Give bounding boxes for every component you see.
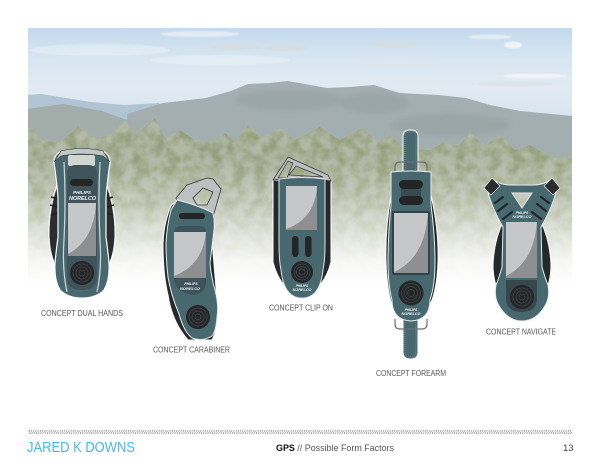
- logo: PHILIPS: [73, 190, 92, 195]
- dial: [186, 305, 210, 329]
- top strap: [403, 130, 418, 175]
- trim lines: [63, 162, 101, 292]
- logo: [69, 190, 97, 202]
- carabiner hook: [176, 178, 221, 217]
- screen: [286, 186, 317, 230]
- screen: [68, 203, 96, 256]
- footer: author name: JARED K DOWNS: [27, 439, 135, 456]
- strap rings: [395, 162, 427, 329]
- screen: [174, 232, 206, 278]
- teal body: [279, 178, 325, 298]
- tree line: [28, 120, 572, 262]
- device: concept carabiner: [163, 178, 221, 340]
- dial: [398, 280, 424, 306]
- logo: PHILIPS: [405, 308, 418, 312]
- logo: NORELCO: [402, 312, 421, 316]
- button block: [399, 180, 423, 205]
- screen: [506, 222, 537, 278]
- teal body: [388, 171, 435, 321]
- logo: [292, 284, 312, 292]
- logo: [512, 211, 532, 219]
- teal body: [488, 181, 556, 321]
- black sides: [386, 195, 438, 305]
- label: concept dual hands: CONCEPT DUAL HANDS: [41, 309, 123, 318]
- clouds: [30, 31, 567, 86]
- white fade: [28, 160, 572, 303]
- label: concept clip on: CONCEPT CLIP ON: [269, 304, 333, 312]
- panel: [174, 226, 206, 295]
- button: [179, 213, 205, 219]
- screen: [392, 211, 430, 275]
- clip: [273, 157, 331, 181]
- distant ridge: [28, 94, 160, 120]
- footer: page number: 13: [563, 443, 574, 454]
- bottom strap: [403, 318, 418, 359]
- logo: NORELCO: [512, 215, 532, 219]
- mountain shading: [240, 92, 505, 134]
- footer: section title: GPS // Possible Form Factors: [276, 443, 395, 453]
- dial panel: [506, 280, 537, 312]
- button: [70, 179, 93, 186]
- device: concept clip on: [273, 157, 331, 298]
- logo: NORELCO: [180, 286, 201, 291]
- inner panel: [67, 165, 97, 290]
- label: concept navigate: CONCEPT NAVIGATE: [486, 328, 556, 336]
- logo: PHILIPS: [184, 282, 198, 286]
- main mountain: [127, 81, 572, 160]
- left hill: [28, 104, 127, 143]
- device: concept forearm: [386, 130, 438, 359]
- logo: NORELCO: [69, 196, 97, 202]
- side grips: [273, 180, 331, 285]
- arm slots: [495, 197, 549, 219]
- tree texture: [28, 118, 572, 252]
- logo: PHILIPS: [516, 211, 529, 215]
- buttons: [292, 236, 312, 257]
- teal body: [54, 152, 110, 298]
- logo: PHILIPS: [296, 284, 309, 288]
- dial: [291, 261, 313, 283]
- label: concept forearm: CONCEPT FOREARM: [376, 369, 446, 378]
- dial: [70, 261, 94, 285]
- logo: NORELCO: [292, 288, 312, 292]
- sky: [28, 28, 572, 120]
- black arm tips: [484, 178, 560, 195]
- black back shell: [163, 204, 218, 340]
- logo: [402, 308, 421, 316]
- dial: [510, 285, 534, 309]
- device: concept navigate: [484, 178, 560, 321]
- device: concept dual hands: [49, 148, 115, 298]
- carry handle: [54, 148, 110, 166]
- teal body: [166, 200, 218, 340]
- panel: mountain landscape photo: [28, 28, 572, 268]
- black shell: [493, 222, 551, 295]
- logo: [180, 282, 201, 291]
- label: concept carabiner: CONCEPT CARABINER: [153, 346, 230, 354]
- side grips: [49, 182, 115, 266]
